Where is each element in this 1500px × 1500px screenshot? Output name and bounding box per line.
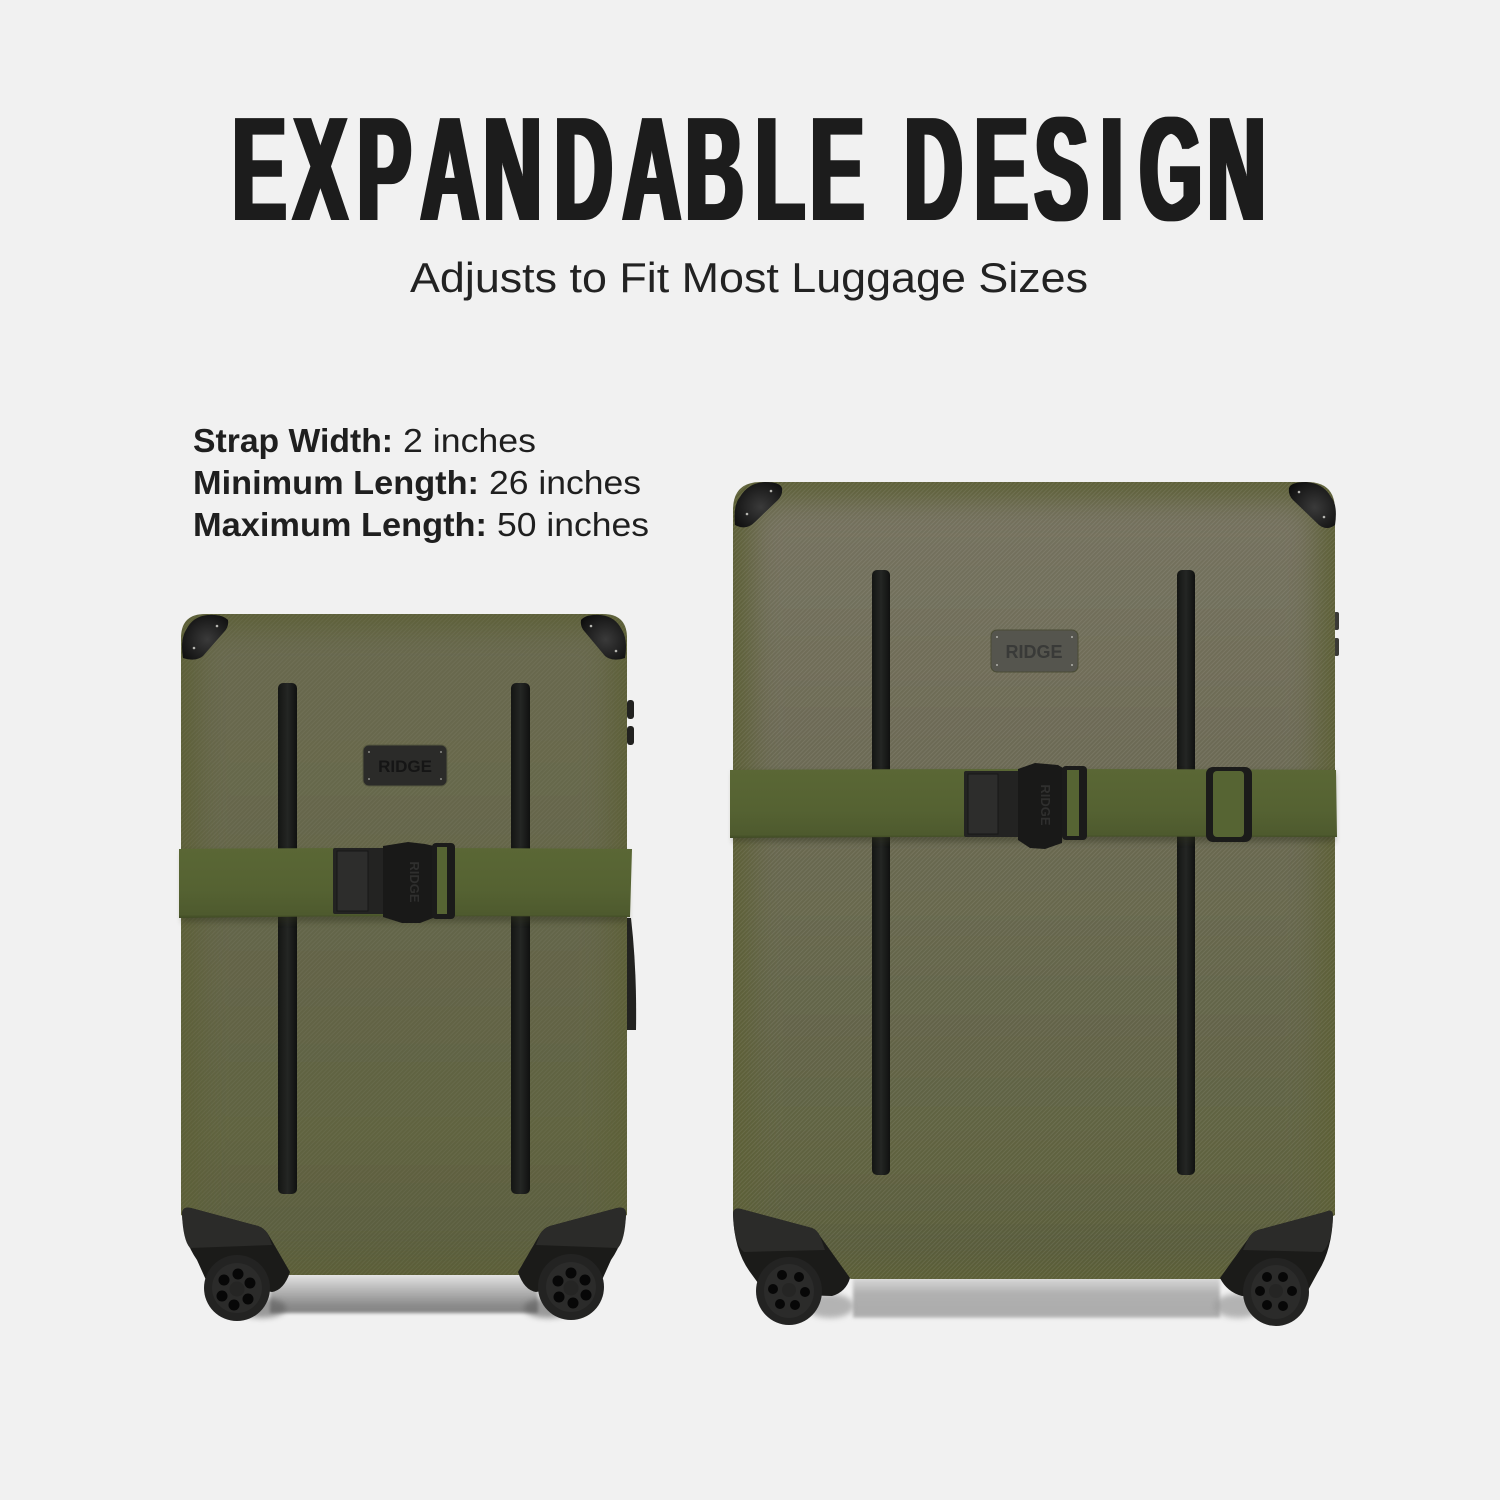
brand plate [363,745,447,786]
corner guards top [735,482,1336,528]
strap specifications: 50 inches [497,506,649,543]
brand plate: RIDGE [378,757,432,776]
subtitle: Adjusts to Fit Most Luggage Sizes [410,254,1088,301]
rails [872,570,1195,1175]
buckle [964,763,1087,849]
suitcase shell [733,482,1335,1279]
title: EXPANDABLE DESIGN [233,87,1265,252]
wheel right [538,1254,604,1320]
rails [278,683,530,1194]
suitcase shell [181,614,627,1275]
strap specifications [193,422,649,543]
wheel left [204,1255,270,1321]
bottom brackets [733,1209,1333,1296]
floor shadow: large suitcase [806,1278,1262,1318]
strap specifications: 26 inches [489,464,641,501]
buckle: RIDGE [407,861,422,903]
strap specifications: Maximum Length: [193,506,487,543]
corner guards top [182,615,626,660]
strap specifications: 2 inches [403,422,536,459]
wheel left [756,1257,822,1325]
small suitcase [179,614,636,1321]
side handle and locks [627,700,636,1030]
strap slider [1206,767,1252,842]
large suitcase [730,482,1339,1326]
floor shadow: small suitcase [238,1274,572,1318]
buckle [333,842,455,923]
wheel right [1243,1258,1309,1326]
strap specifications: Strap Width: [193,422,393,459]
brand plate: RIDGE [1005,642,1063,662]
buckle: RIDGE [1038,784,1053,826]
strap [730,769,1337,842]
strap [179,848,632,922]
brand plate [991,630,1078,672]
strap specifications: Minimum Length: [193,464,479,501]
bottom brackets [182,1208,626,1292]
side locks [1334,612,1339,656]
